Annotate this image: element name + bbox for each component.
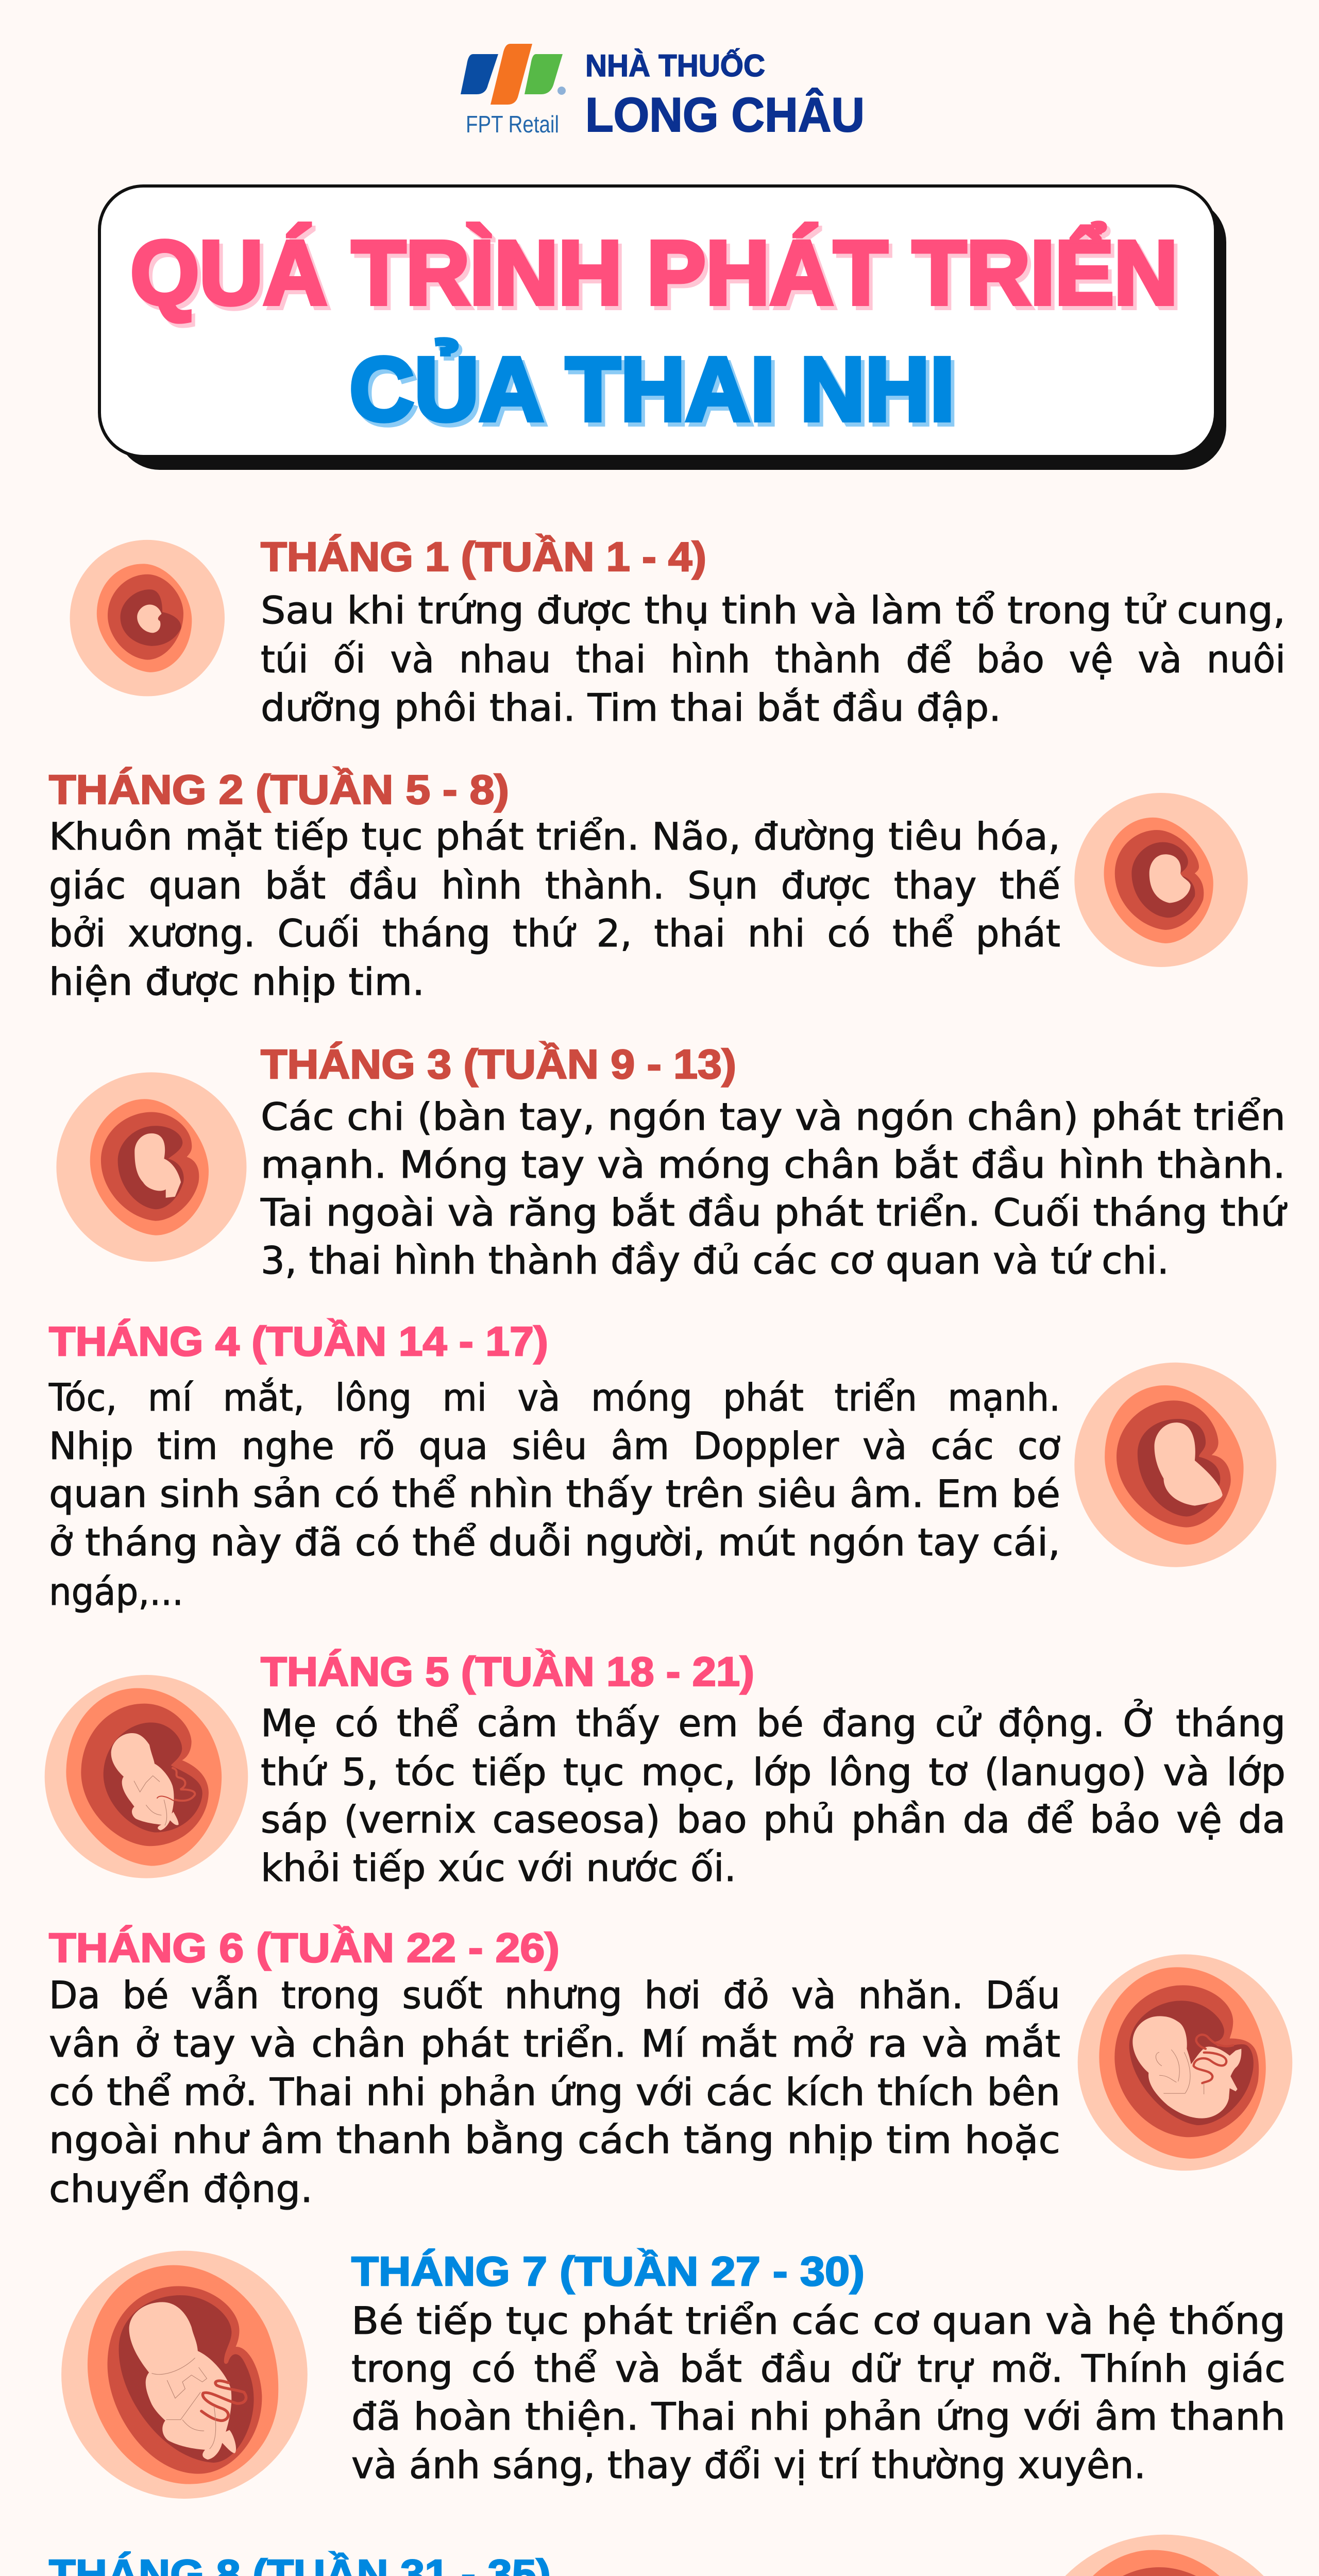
text: month 6 description: vân ở tay và chân phát triển. Mí mắt mở ra và mắt (49, 2022, 1060, 2066)
text: month 5 description: khỏi tiếp xúc với nước ối. (261, 1846, 736, 1890)
heading: month 5: THÁNG 5 (TUẦN 18 - 21) (261, 1649, 754, 1694)
text: month 6 description: Da bé vẫn trong suốt nhưng hơi đỏ và nhăn. Dấu (49, 1974, 1060, 2018)
text: month 7 description (351, 2299, 1286, 2487)
text: month 3 description: Tai ngoài và răng bắt đầu phát triển. Cuối tháng thứ (260, 1191, 1288, 1235)
panel: month 5 (45, 1649, 1286, 1890)
icon: fetus month 6 (1078, 1954, 1292, 2171)
title line 2: CỦA THAI NHI (353, 343, 958, 444)
text: month 1 description: túi ối và nhau thai hình thành để bảo vệ và nuôi (261, 638, 1286, 682)
title card (99, 186, 1226, 470)
text: month 6 description: có thể mở. Thai nhi phản ứng với các kích thích bên (49, 2071, 1060, 2114)
text: month 5 description: Mẹ có thể cảm thấy em bé đang cử động. Ở tháng (261, 1699, 1286, 1745)
panel: month 8 (48, 2535, 1304, 2576)
heading: month 1: THÁNG 1 (TUẦN 1 - 4) (261, 534, 706, 580)
text: month 2 description: hiện được nhịp tim. (49, 960, 425, 1004)
text: month 7 description: đã hoàn thiện. Thai nhi phản ứng với âm thanh (351, 2395, 1286, 2439)
icon: fetus month 8 (1025, 2535, 1304, 2576)
text: month 4 description: ngáp,... (49, 1570, 183, 1614)
text: month 2 description: giác quan bắt đầu hình thành. Sụn được thay thế (49, 864, 1060, 908)
icon: embryo month 2 (1074, 793, 1248, 967)
text: month 6 description: chuyển động. (49, 2167, 313, 2211)
text: month 4 description: Tóc, mí mắt, lông mi và móng phát triển mạnh. (48, 1376, 1060, 1420)
heading: month 4: THÁNG 4 (TUẦN 14 - 17) (49, 1318, 548, 1364)
logo text: FPT Retail: FPT Retail (466, 111, 559, 138)
icon: fetus month 4 (1074, 1363, 1276, 1567)
text: month 3 description: 3, thai hình thành đầy đủ các cơ quan và tứ chi. (261, 1239, 1169, 1283)
text: month 2 description (49, 815, 1060, 1004)
text: month 4 description: ở tháng này đã có thể duỗi người, mút ngón tay cái, (49, 1521, 1060, 1565)
text: month 7 description: Bé tiếp tục phát triển các cơ quan và hệ thống (351, 2299, 1286, 2343)
text: month 4 description: Nhịp tim nghe rõ qua siêu âm Doppler và các cơ (49, 1425, 1060, 1468)
panel: month 2 (49, 767, 1248, 1004)
heading: month 7: THÁNG 7 (TUẦN 27 - 30) (351, 2248, 865, 2294)
text: month 2 description: Khuôn mặt tiếp tục phát triển. Não, đường tiêu hóa, (49, 815, 1060, 859)
text: month 6 description (49, 1974, 1060, 2211)
icon: fetus month 5 (45, 1675, 248, 1878)
text: month 5 description: sáp (vernix caseosa) bao phủ phần da để bảo vệ da (261, 1798, 1286, 1842)
panel: month 6 (49, 1925, 1292, 2211)
text: month 7 description: và ánh sáng, thay đổi vị trí thường xuyên. (351, 2444, 1146, 2487)
text: month 2 description: bởi xương. Cuối tháng thứ 2, thai nhi có thể phát (49, 912, 1060, 956)
text: month 1 description (261, 589, 1286, 730)
icon: embryo month 1 (70, 540, 225, 696)
text: month 3 description (260, 1095, 1288, 1283)
text: month 7 description: trong có thể và bắt đầu dữ trự mỡ. Thính giác (351, 2347, 1286, 2391)
panel: month 4 (48, 1318, 1276, 1614)
heading: month 3: THÁNG 3 (TUẦN 9 - 13) (261, 1041, 736, 1087)
text: month 1 description: Sau khi trứng được thụ tinh và làm tổ trong tử cung, (261, 589, 1286, 633)
panel: month 3 (56, 1041, 1288, 1283)
panel: month 1 (70, 534, 1286, 730)
logo text: Long Châu: LONG CHÂU (585, 87, 865, 142)
heading: month 6: THÁNG 6 (TUẦN 22 - 26) (49, 1925, 560, 1971)
text: month 4 description: quan sinh sản có thể nhìn thấy trên siêu âm. Em bé (49, 1472, 1060, 1516)
icon: FPT mark (461, 44, 566, 105)
heading: month 2: THÁNG 2 (TUẦN 5 - 8) (49, 767, 509, 812)
text: month 3 description: Các chi (bàn tay, ngón tay và ngón chân) phát triển (261, 1095, 1286, 1139)
icon: embryo month 3 (56, 1072, 246, 1262)
text: month 6 description: ngoài như âm thanh bằng cách tăng nhịp tim hoặc (49, 2119, 1060, 2162)
icon: fetus month 7 (61, 2251, 308, 2499)
logo text: Nhà thuốc: NHÀ THUỐC (585, 48, 765, 83)
text: month 5 description: thứ 5, tóc tiếp tục mọc, lớp lông tơ (lanugo) và lớp (261, 1751, 1286, 1794)
title line 1: QUÁ TRÌNH PHÁT TRIỂN (134, 227, 1181, 328)
panel: month 7 (61, 2248, 1286, 2499)
text: month 1 description: dưỡng phôi thai. Tim thai bắt đầu đập. (261, 686, 1001, 730)
text: month 4 description (48, 1376, 1060, 1614)
text: month 3 description: mạnh. Móng tay và móng chân bắt đầu hình thành. (261, 1143, 1286, 1187)
title line 2: CỦA THAI NHI (349, 339, 955, 440)
text: month 5 description (261, 1699, 1286, 1890)
title line 1: QUÁ TRÌNH PHÁT TRIỂN (130, 223, 1178, 324)
logo: Nhà thuốc Long Châu (461, 44, 865, 142)
